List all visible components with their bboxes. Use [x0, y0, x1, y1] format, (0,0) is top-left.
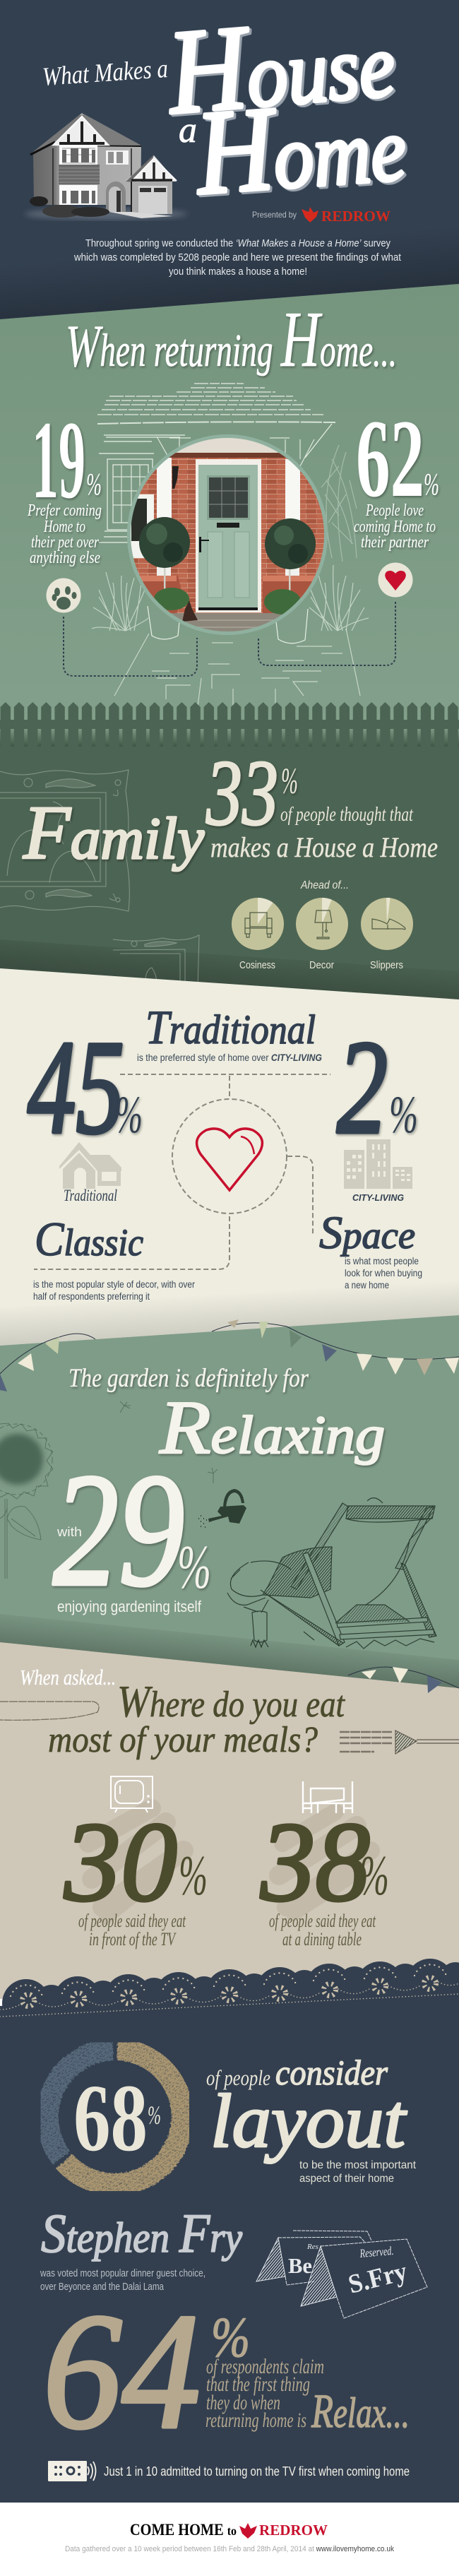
text: in front of tv — [78, 1911, 186, 1949]
icon: outlined heart — [197, 1129, 262, 1190]
text: space description — [345, 1256, 422, 1290]
photo: front door in circle — [127, 431, 332, 638]
text: in front of tv: of people said they eat — [78, 1911, 186, 1931]
heading: Classic: Classic — [35, 1212, 143, 1266]
lace border — [0, 1959, 459, 2504]
text: of people thought that: of people thought that — [280, 803, 414, 826]
stat: 19%: % — [86, 467, 102, 501]
stat: 33%: % — [281, 761, 298, 802]
intro paragraph: Throughout spring we conducted the ‘What Makes a House a Home’ survey — [85, 237, 391, 249]
sketch: left bush — [92, 572, 148, 631]
text: people love coming home to partner: People love — [365, 501, 424, 520]
text: when asked: When asked... — [20, 1665, 116, 1690]
label: traditional: Traditional — [64, 1187, 117, 1204]
panel: family — [0, 702, 459, 1002]
sketch: paved path — [114, 629, 360, 706]
text: garden heading: The garden is definitely for — [68, 1364, 309, 1393]
sketch: right bush — [309, 565, 369, 631]
bunting lower — [348, 1667, 459, 1693]
icon: slippers — [361, 896, 413, 950]
text: enjoying gardening itself: enjoying gardening itself — [57, 1598, 202, 1615]
panel: layout and relax navy — [0, 1959, 459, 2504]
presented by label: Presented by — [252, 210, 297, 220]
label: cosiness: Cosiness — [239, 959, 275, 971]
text: at dining table: of people said they eat — [269, 1911, 376, 1931]
sketch: knife — [0, 1702, 99, 1720]
text: dinner guest description: over Beyonce and the Dalai Lama — [40, 2281, 165, 2293]
icon: heart — [378, 562, 412, 598]
label: city-living: CITY-LIVING — [352, 1192, 404, 1203]
stat: 19% — [32, 398, 102, 522]
stat: 68%: % — [148, 2101, 161, 2130]
stat: 38%: 38 — [260, 1799, 370, 1925]
intro paragraph: which was completed by 5208 people and here we present the findings of what — [73, 251, 402, 263]
text: preferred style: is the preferred style of home over CITY-LIVING — [137, 1052, 322, 1063]
footer slogan: COME HOME to — [130, 2521, 237, 2539]
sketch: reserved place cards — [256, 2231, 427, 2318]
sketch: deck chair — [227, 1498, 436, 1649]
bunting — [0, 1319, 459, 1391]
stat: 45%: 45 — [28, 1014, 124, 1162]
icon: paw — [47, 578, 81, 613]
connector: partner to door — [258, 602, 395, 665]
panel: header — [0, 0, 459, 325]
illustration: grayscale house — [25, 113, 187, 220]
stat: 68%: 68 — [73, 2065, 148, 2171]
stat: 64%: 64 — [43, 2279, 201, 2463]
icon: remote control — [48, 2461, 96, 2481]
stat: 2%: 2 — [337, 1014, 388, 1162]
text: first thing when returning home: returning home is — [205, 2409, 306, 2432]
icon: city buildings — [344, 1139, 412, 1189]
stat: 38%: % — [359, 1845, 389, 1907]
heading: Family: Family — [23, 791, 205, 875]
footnote: data source: Data gathered over a 10 week period between 16th Feb and 28th April, 2014 at www.ilovemyhome.co.uk — [65, 2545, 394, 2553]
label: slippers: Slippers — [370, 959, 403, 971]
logo: Redrow footer: REDROW — [259, 2522, 328, 2539]
connector: pet to door — [64, 617, 197, 676]
icon: watering can — [198, 1489, 246, 1527]
panel: footer — [0, 2503, 459, 2576]
stat: 30%: 30 — [64, 1799, 177, 1925]
stat: 29%: % — [177, 1533, 211, 1602]
text: consider: consider — [275, 2053, 388, 2092]
icon: tv — [111, 1776, 153, 1812]
text: space description: look for when buying — [345, 1268, 422, 1278]
text: prefer coming home to pet — [27, 501, 102, 567]
text: Ahead of: Ahead of... — [300, 879, 349, 891]
icon: decor lamp — [296, 896, 348, 950]
icon: traditional house — [59, 1142, 121, 1189]
dashed connectors and ring — [34, 1074, 330, 1269]
sketch: reserved place cards: Reserved. — [359, 2244, 394, 2260]
icon: dandelion seeds — [120, 1401, 217, 1483]
icon: dining table — [303, 1781, 352, 1813]
panel: where do you eat — [0, 1614, 459, 1999]
text: to be the most important: to be the most important — [299, 2159, 417, 2171]
stat: 45%: % — [115, 1086, 143, 1144]
sketch: picture frame lower — [113, 935, 199, 989]
heading: Stephen Fry: Stephen Fry — [41, 2202, 242, 2264]
text: prefer coming home to pet: Prefer coming — [27, 501, 102, 520]
stat: 29%: 29 — [53, 1440, 184, 1620]
brush stroke behind 38 — [279, 1812, 371, 1914]
text: to be the most important — [299, 2159, 417, 2185]
text: first thing when returning home — [205, 2355, 324, 2432]
text: dinner guest description: was voted most popular dinner guest choice, — [40, 2268, 205, 2279]
text: to be the most important: aspect of their home — [299, 2173, 394, 2185]
text: space description: is what most people — [345, 1256, 419, 1266]
text: prefer coming home to pet: their pet over — [31, 533, 99, 552]
sketch: sunflower — [0, 1423, 53, 1579]
title: a: a — [179, 110, 197, 150]
title: House: House — [162, 0, 399, 139]
label: decor: Decor — [309, 959, 334, 971]
logo: Redrow: REDROW — [321, 208, 391, 225]
icon: cosiness armchair — [232, 896, 284, 950]
panel: traditional cream — [0, 968, 459, 1363]
stat: 62%: % — [424, 467, 439, 501]
brush stroke behind 30 — [88, 1808, 184, 1918]
sketch: plant pots — [148, 606, 308, 643]
text: first thing when returning home: they do when — [206, 2391, 280, 2414]
sketch: reserved place cards: S.Fry — [345, 2257, 410, 2300]
panel: garden — [0, 1315, 459, 1690]
sketch: fork — [340, 1731, 459, 1754]
heading: layout: layout — [210, 2079, 407, 2164]
text: classic description: half of respondents preferring it — [33, 1291, 150, 1302]
heading: Relaxing: Relaxing — [159, 1386, 385, 1470]
stat: 2%: % — [389, 1086, 418, 1144]
sketch: house outline — [92, 384, 369, 706]
text: first thing when returning home: of respondents claim — [206, 2355, 324, 2378]
text: dinner guest description — [40, 2268, 205, 2293]
text: at dining table: at a dining table — [282, 1929, 362, 1949]
intro paragraph — [73, 237, 402, 278]
stat: 19%: 19 — [32, 398, 85, 522]
text: at dining table — [269, 1911, 376, 1949]
title: What Makes a: What Makes a — [42, 54, 169, 92]
stat: 64%: % — [211, 2307, 250, 2369]
text: of people: of people — [206, 2065, 270, 2090]
text: in front of tv: in front of the TV — [89, 1929, 177, 1949]
sketch: picture frame left — [0, 770, 129, 911]
text: classic description: is the most popular style of decor, with over — [33, 1279, 195, 1290]
heading: where do you eat: Where do you eat — [117, 1676, 345, 1726]
heading: Relax: Relax... — [311, 2384, 410, 2438]
heading: When returning Home: When returning Home... — [66, 296, 397, 384]
chart: 68 percent donut — [47, 2050, 182, 2184]
text: space description: a new home — [345, 1280, 389, 1290]
sketch: reserved place cards: Res — [306, 2243, 318, 2251]
heading: most of your meals: most of your meals? — [48, 1720, 318, 1760]
panel: when returning home — [0, 284, 459, 735]
text: prefer coming home to pet: anything else — [30, 549, 100, 567]
text: first thing when returning home: that the first thing — [206, 2373, 310, 2396]
sketch: wispy tree — [321, 445, 357, 562]
heading: Traditional: Traditional — [145, 1000, 316, 1054]
text: people love coming home to partner — [354, 501, 436, 552]
intro paragraph: you think makes a house a home! — [169, 266, 307, 278]
stat: 30%: % — [179, 1845, 208, 1907]
text: classic description — [33, 1279, 195, 1302]
heading: Space: Space — [319, 1207, 415, 1259]
title: Home: Home — [191, 73, 410, 220]
stat: 33%: 33 — [205, 740, 278, 845]
sketch: reserved place cards: Be — [288, 2253, 312, 2278]
text: prefer coming home to pet: Home to — [43, 518, 85, 536]
text: people love coming home to partner: their partner — [361, 533, 429, 552]
text: with: with — [56, 1525, 82, 1539]
